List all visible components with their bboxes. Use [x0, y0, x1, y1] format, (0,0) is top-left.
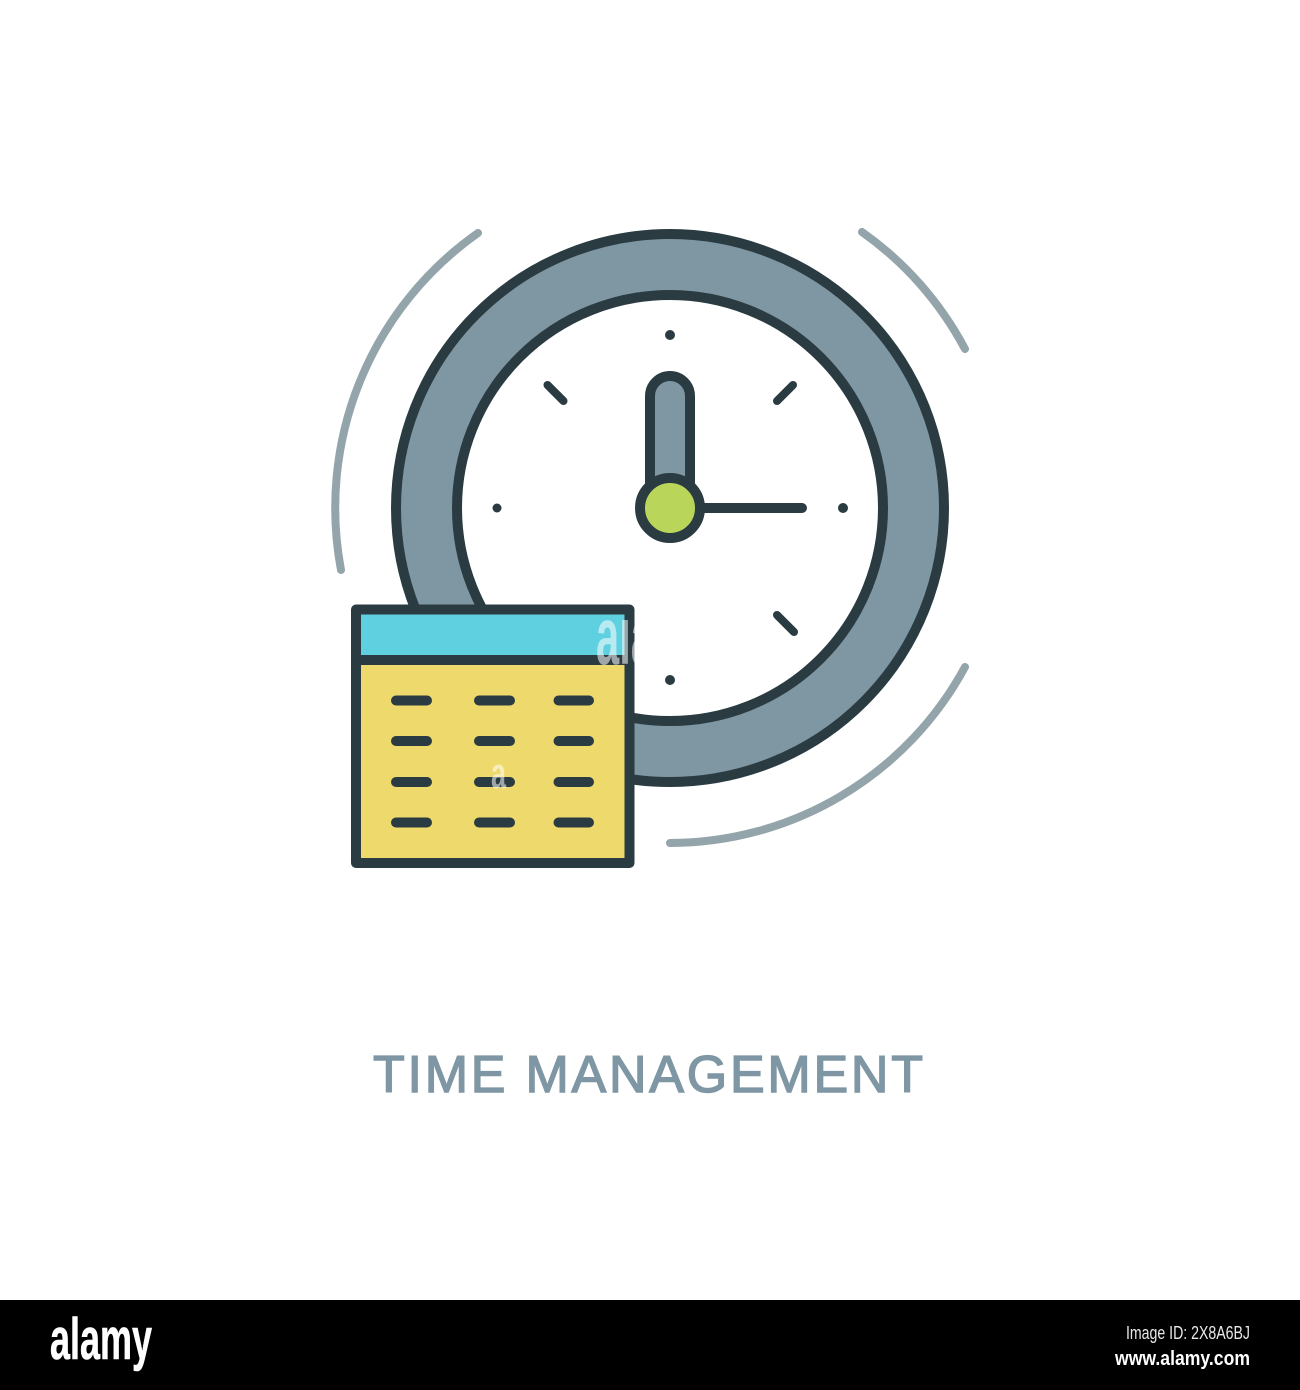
calendar outline: [356, 610, 630, 863]
motion arcs around clock: [335, 232, 965, 843]
title: TIME MANAGEMENT: [373, 1046, 923, 1104]
footer logo: alamy: [50, 1307, 152, 1372]
icon: calendar: [356, 610, 630, 863]
clock hub: [640, 478, 700, 538]
clock ring: [426, 264, 914, 752]
watermark fragments: a: [491, 749, 506, 798]
website: www.alamy.com: [1114, 1348, 1250, 1370]
clock ring outlines: [396, 234, 944, 782]
tick marks: [548, 385, 794, 632]
calendar body: [356, 610, 630, 863]
icon: wall clock: [396, 234, 944, 782]
watermark fragments: ala: [596, 591, 655, 682]
hour markers: [492, 330, 848, 685]
image id: Image ID: 2X8A6BJ: [1126, 1323, 1250, 1343]
calendar date rows: [396, 700, 589, 822]
footer bar: [0, 1300, 1300, 1390]
hour hand: [650, 376, 690, 500]
watermark fragments: [492, 620, 634, 788]
calendar header: [356, 610, 630, 660]
minute hand: [700, 503, 802, 513]
